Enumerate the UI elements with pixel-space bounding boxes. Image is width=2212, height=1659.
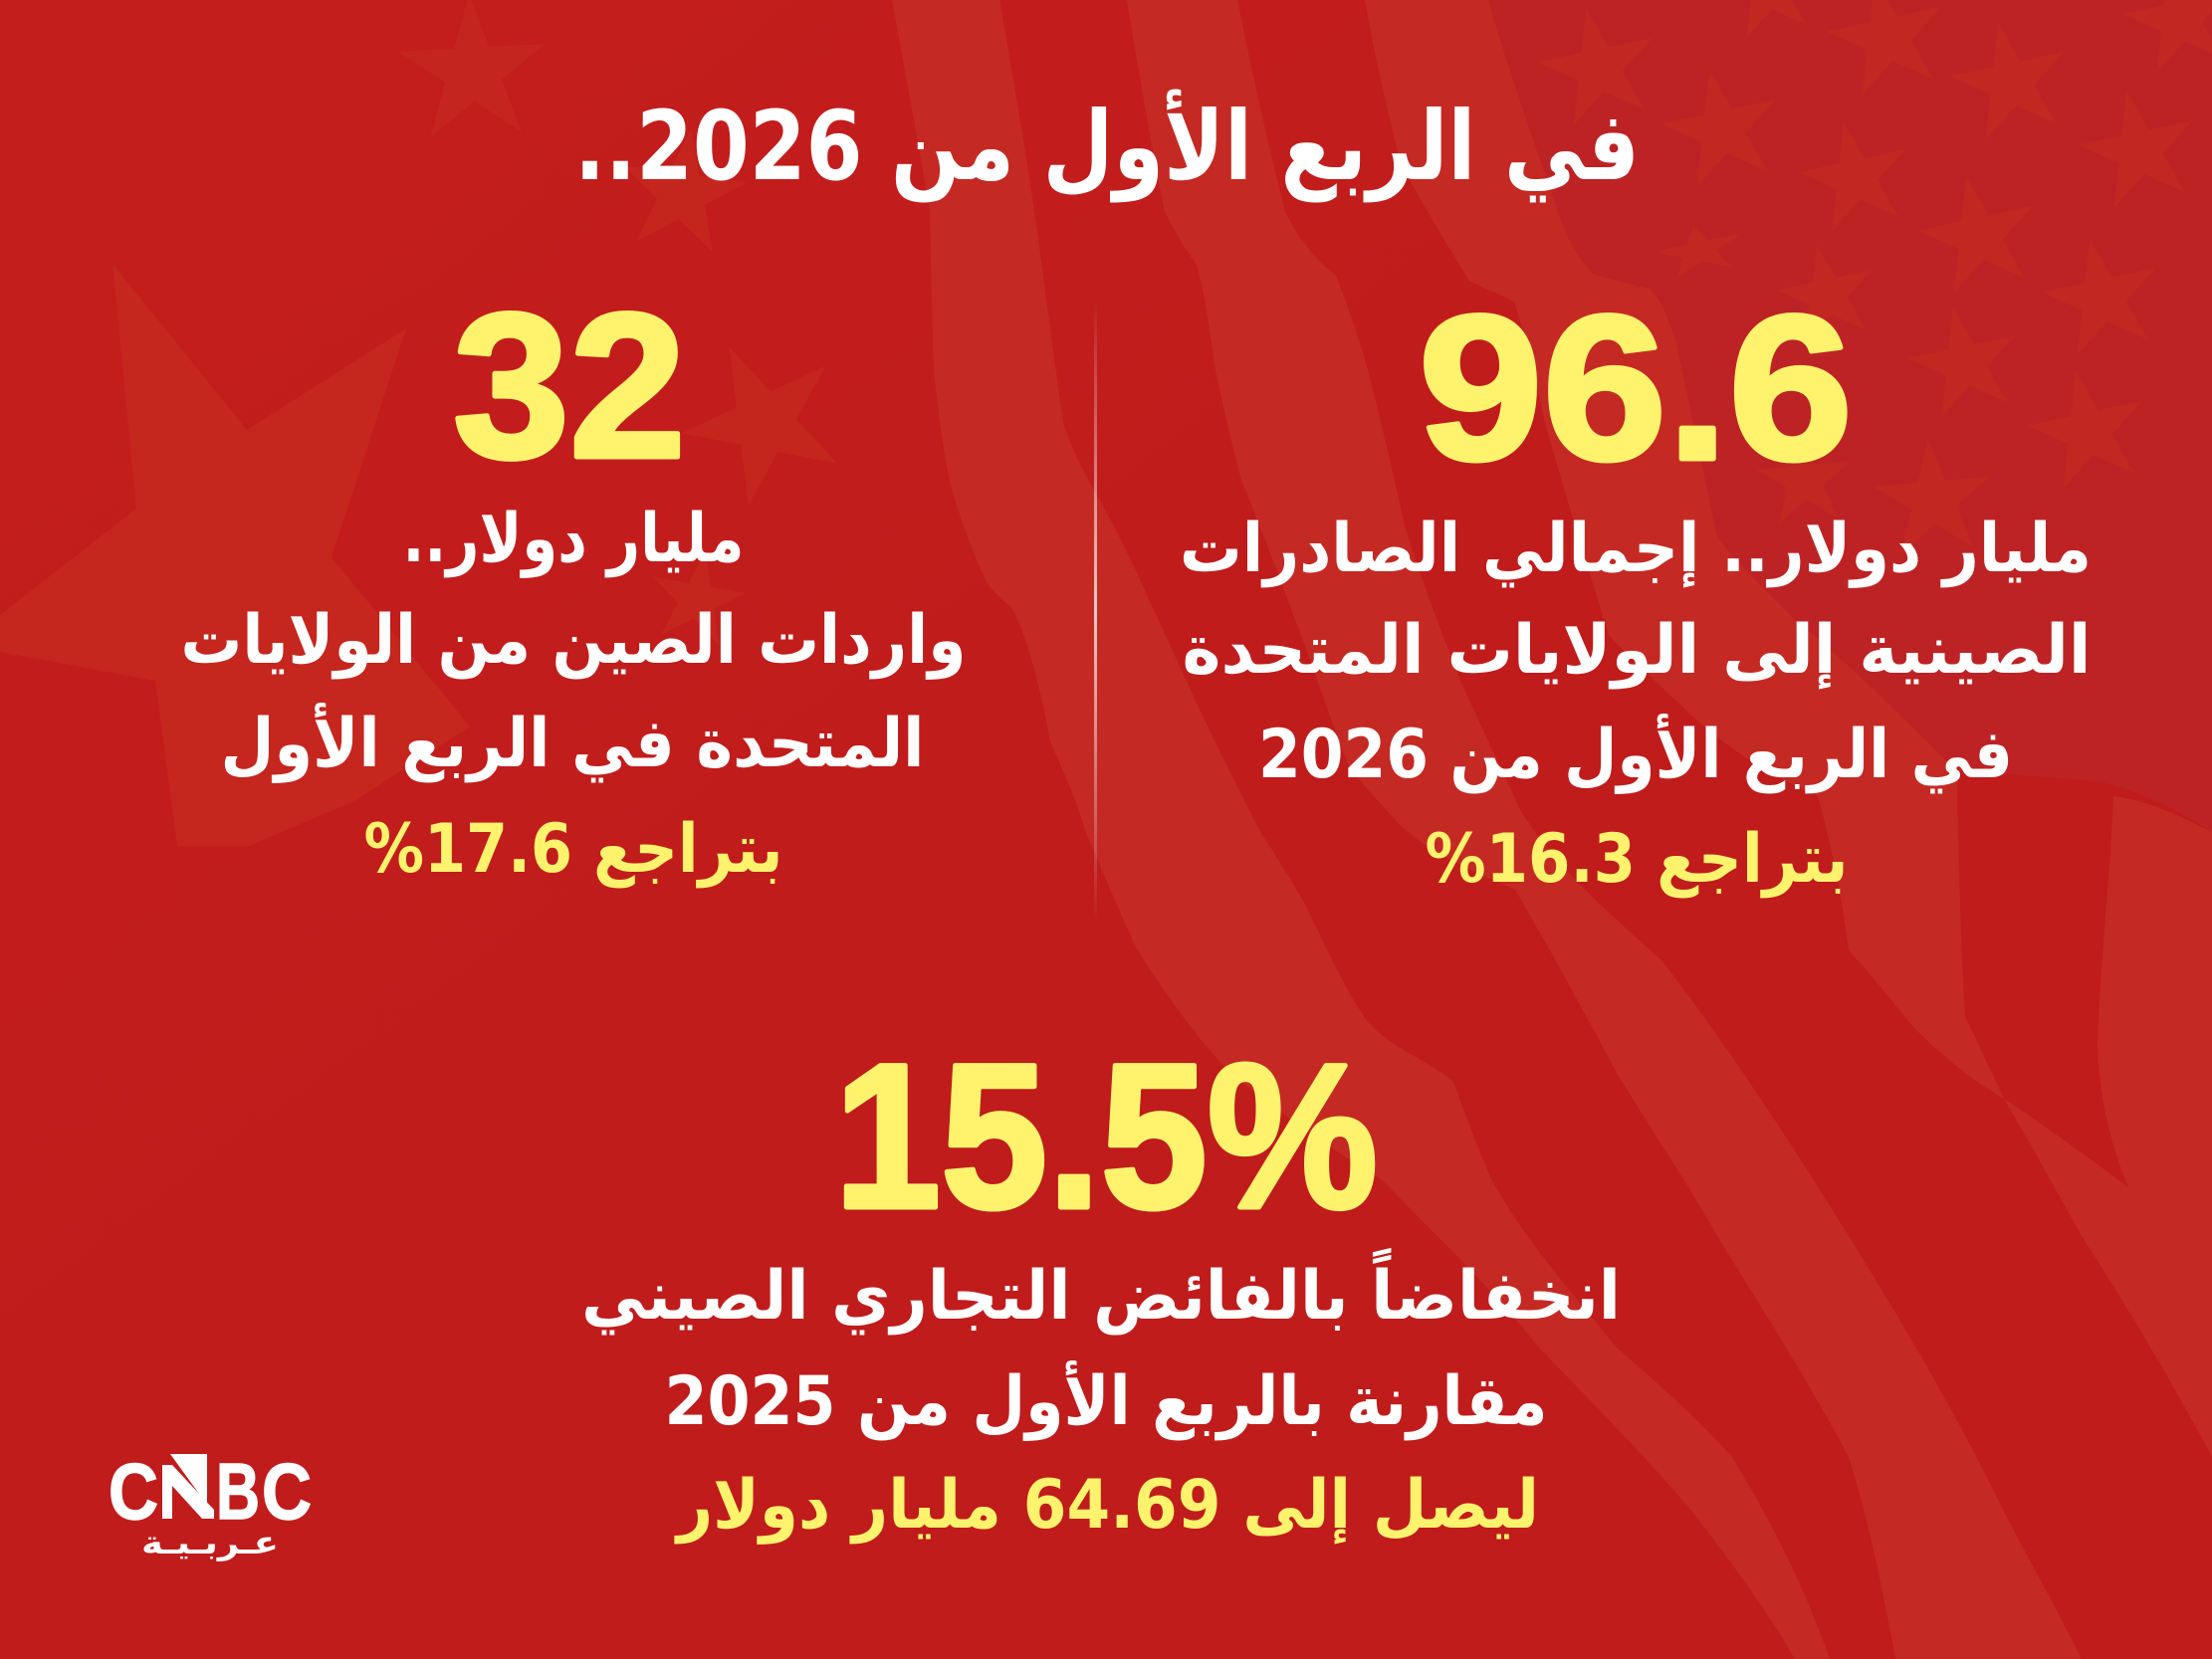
- logo: CNBC Arabia: عـربـيـة: [141, 1524, 279, 1561]
- panel: China exports to US: [1180, 273, 2092, 899]
- panel: trade surplus: [581, 1021, 1621, 1545]
- text: exports description: في الربع الأول من 2026: [1258, 713, 2013, 794]
- background: China flag large star: [0, 264, 470, 846]
- background: flag stripes: [892, 0, 2212, 1659]
- text: imports description: واردات الصين من الولايات: [181, 601, 966, 680]
- background: flag small stars: [395, 0, 2212, 648]
- title: في الربع الأول من 2026..: [574, 89, 1640, 203]
- stripe E: [2004, 796, 2212, 1457]
- divider: [1094, 297, 1097, 924]
- logo: CNBC Arabia: C: [109, 1447, 158, 1536]
- stat: 32: 32: [453, 271, 686, 501]
- stat: 15.5%: 15.5%: [834, 1021, 1378, 1251]
- text: surplus description: [581, 1247, 1621, 1441]
- text: surplus description: مقارنة بالربع الأول من 2025: [664, 1359, 1547, 1441]
- text: exports decline: بتراجع 16.3%: [1426, 820, 1848, 899]
- text: imports description: [181, 500, 966, 783]
- text: exports description: مليار دولار.. إجمالي الصادرات: [1180, 510, 2092, 588]
- text: imports decline: بتراجع 17.6%: [364, 810, 782, 889]
- logo: CNBC Arabia: [109, 1447, 312, 1561]
- text: surplus value: ليصل إلى 64.69 مليار دولار: [674, 1466, 1539, 1545]
- text: exports description: الصينية إلى الولايات المتحدة: [1183, 611, 2091, 690]
- text: exports description: [1180, 510, 2092, 794]
- stripe B: [1127, 0, 2082, 1659]
- background: US flag canton: [1488, 0, 2212, 832]
- logo: CNBC Arabia: C: [262, 1447, 312, 1536]
- text: imports description: المتحدة في الربع الأول: [221, 702, 924, 783]
- stat: 96.6: 96.6: [1419, 273, 1853, 503]
- text: imports description: مليار دولار..: [402, 500, 745, 578]
- panel: China imports from US: [181, 271, 966, 889]
- stripe C: [1365, 0, 2004, 1099]
- text: surplus description: انخفاضاً بالفائض التجاري الصيني: [581, 1247, 1621, 1336]
- stripe A: [892, 0, 1830, 1659]
- logo: CNBC Arabia: B: [216, 1447, 260, 1536]
